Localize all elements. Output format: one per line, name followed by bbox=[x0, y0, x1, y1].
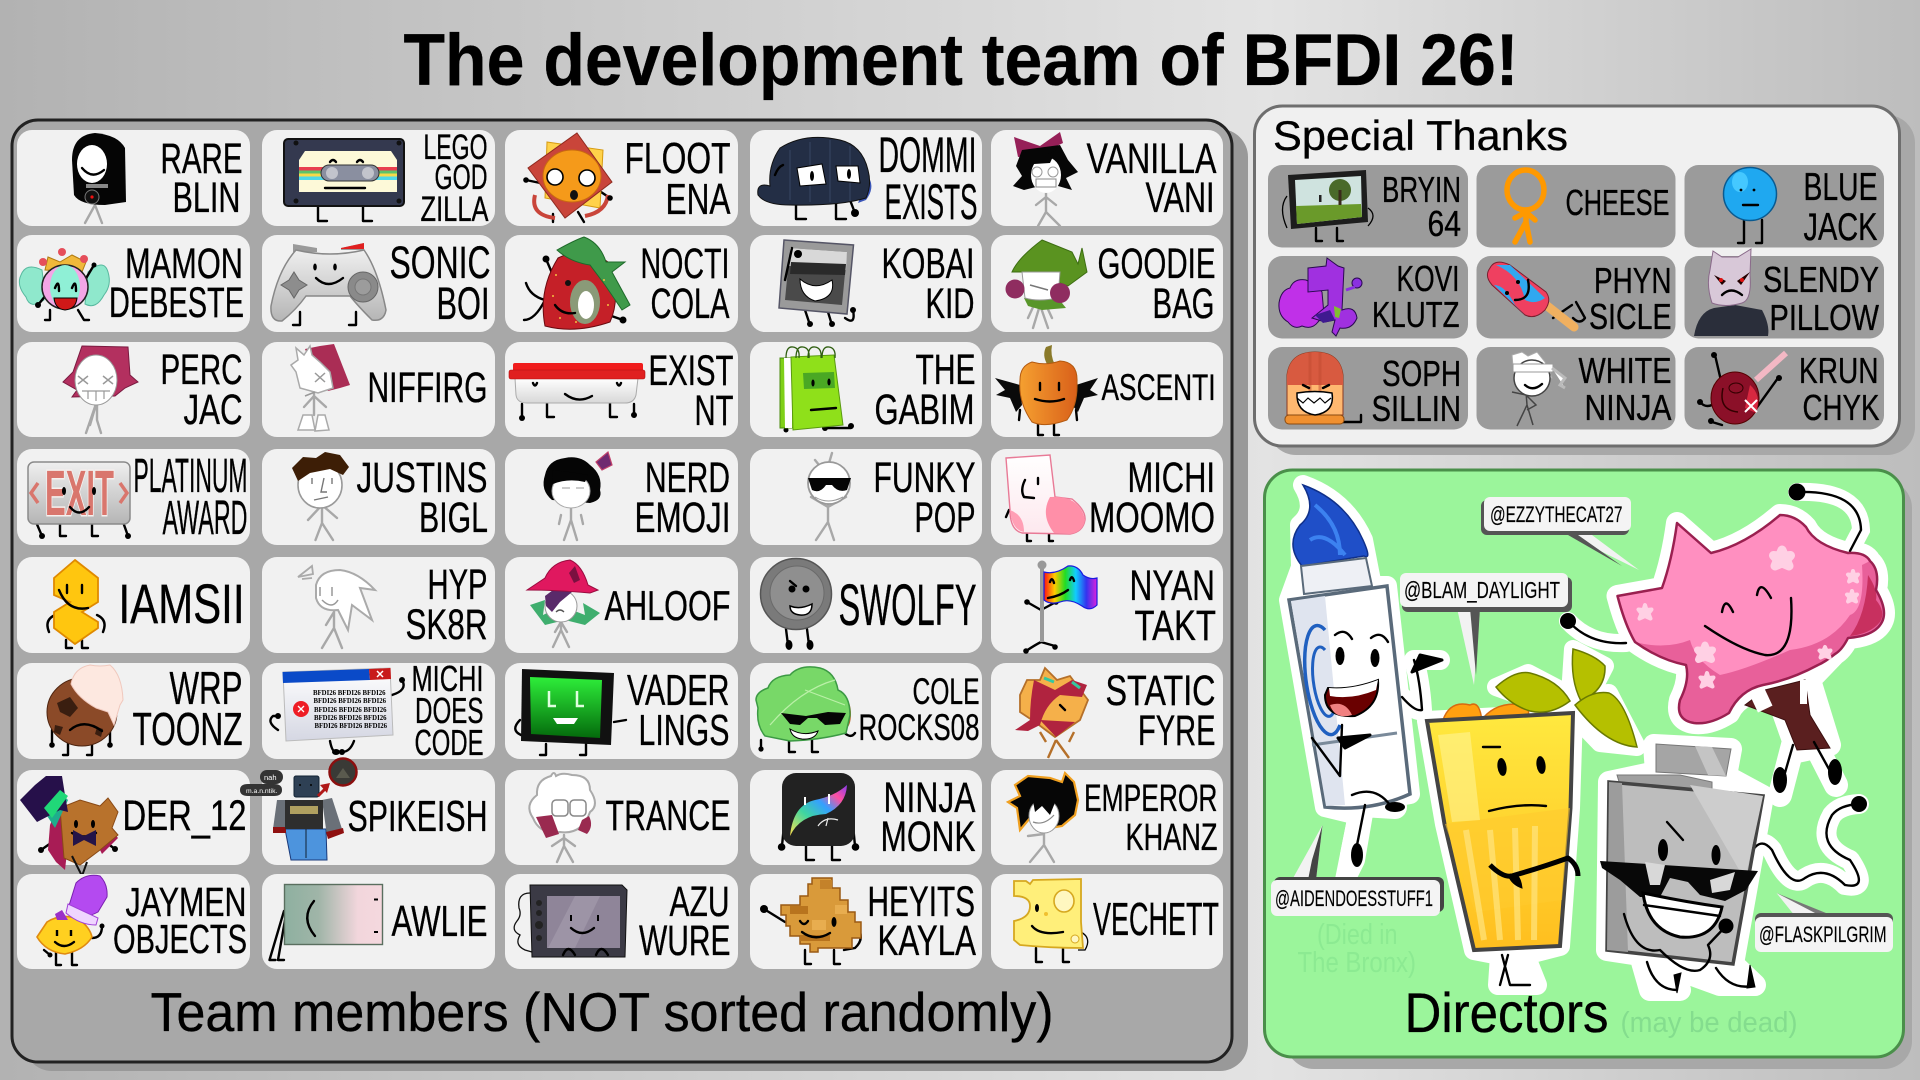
card: HEYITS KAYLA bbox=[750, 874, 982, 969]
icon: static fyre bbox=[1015, 668, 1088, 758]
card: NOCTI COLA bbox=[505, 235, 738, 332]
name: KOVI KLUTZ: KLUTZ bbox=[1372, 294, 1460, 335]
name: COLE ROCKS08: ROCKS08 bbox=[858, 707, 980, 748]
name: SOPH SILLIN: SILLIN bbox=[1372, 388, 1461, 429]
name: PHYN SICLE bbox=[1589, 260, 1672, 337]
name: NIFFIRG: NIFFIRG bbox=[368, 364, 488, 412]
name: VADER LINGS: VADER bbox=[627, 666, 730, 715]
name: LEGO GOD ZILLA: LEGO bbox=[424, 128, 488, 167]
card: RARE BLIN bbox=[17, 130, 250, 226]
card: FUNKY POP bbox=[750, 449, 982, 545]
card: KRUN CHYK bbox=[1684, 347, 1884, 430]
icon: strawberry bbox=[524, 237, 630, 329]
card: KOBAI KID bbox=[750, 235, 982, 332]
name: NYAN TAKT: TAKT bbox=[1134, 602, 1216, 650]
name: GOODIE BAG: BAG bbox=[1152, 280, 1214, 328]
card: FLOOT ENA bbox=[505, 130, 738, 226]
name: THE GABIM bbox=[874, 346, 976, 434]
card: TRANCE bbox=[505, 770, 738, 865]
name: WHITE NINJA bbox=[1578, 350, 1672, 428]
icon: drawing tablet bbox=[514, 885, 627, 957]
name: COLE ROCKS08 bbox=[858, 671, 980, 748]
card: AHLOOF bbox=[505, 557, 738, 653]
name: COLE ROCKS08: COLE bbox=[912, 671, 980, 712]
icon: procreate app bbox=[778, 773, 859, 860]
card: GOODIE BAG bbox=[991, 235, 1223, 332]
icon: cassette bbox=[284, 139, 404, 221]
icon: roblox avatar bbox=[240, 758, 356, 860]
card: IAMSII bbox=[17, 557, 250, 653]
icon: lettuce bbox=[756, 667, 855, 752]
name: NINJA MONK bbox=[880, 774, 976, 861]
card: MICHI MOOMO bbox=[991, 449, 1223, 545]
name: WRP TOONZ: TOONZ bbox=[132, 703, 242, 755]
name: NERD EMOJI bbox=[634, 454, 730, 542]
name: BRYIN 64: 64 bbox=[1428, 203, 1461, 244]
icon: roblox avatar: nah bbox=[264, 773, 277, 782]
name: SWOLFY: SWOLFY bbox=[838, 573, 976, 638]
name: STATIC FYRE: STATIC bbox=[1106, 667, 1216, 715]
name: GOODIE BAG bbox=[1098, 240, 1216, 328]
heading: directors: Directors bbox=[1404, 981, 1608, 1044]
name: AZU WURE: AZU bbox=[670, 878, 730, 926]
name: DOMMI EXISTS bbox=[878, 127, 978, 230]
name: KOBAI KID: KID bbox=[926, 280, 974, 328]
card: HYP SK8R bbox=[262, 557, 495, 653]
card: SPIKEISH bbox=[240, 758, 495, 865]
icon: error window: BFDI26 BFDI26 BFDI26 bbox=[314, 715, 387, 722]
panel: team members: AWARD bbox=[162, 492, 248, 545]
name: THE GABIM: THE bbox=[916, 346, 976, 394]
name: TRANCE: TRANCE bbox=[606, 792, 730, 840]
name: DER_12: DER_12 bbox=[122, 792, 246, 840]
panel: directors bbox=[1264, 470, 1912, 1069]
name: NINJA MONK: NINJA bbox=[884, 774, 976, 822]
icon: error window: BFDI26 BFDI26 BFDI26 bbox=[314, 698, 387, 705]
name: WHITE NINJA: WHITE bbox=[1578, 350, 1672, 391]
card: EXIST NT bbox=[505, 342, 738, 437]
card: LEGO GOD ZILLA bbox=[262, 128, 495, 229]
name: NOCTI COLA: NOCTI bbox=[640, 240, 730, 288]
callout: @BLAM_DAYLIGHT bbox=[1400, 573, 1572, 685]
icon: error window: BFDI26 BFDI26 BFDI26 bbox=[313, 690, 386, 697]
icon: game controller bbox=[271, 243, 386, 325]
name: AZU WURE bbox=[639, 878, 730, 965]
name: HYP SK8R: SK8R bbox=[406, 601, 488, 649]
name: SONIC BOI: SONIC bbox=[390, 237, 490, 288]
name: JAYMEN OBJECTS: OBJECTS bbox=[113, 916, 247, 962]
name: EMPEROR KHANZ bbox=[1084, 778, 1218, 859]
name: DOMMI EXISTS: EXISTS bbox=[884, 174, 978, 230]
name: MICHI DOES CODE: DOES bbox=[415, 690, 484, 731]
icon: white ninja bbox=[1512, 352, 1565, 426]
icon: iced cookie bbox=[47, 665, 123, 755]
name: MICHI DOES CODE bbox=[412, 658, 484, 763]
name: AZU WURE: WURE bbox=[639, 917, 730, 965]
card: NYAN TAKT bbox=[991, 557, 1223, 654]
name: IAMSII: IAMSII bbox=[118, 572, 244, 635]
callout: @AIDENDOESSTUFF1 bbox=[1271, 825, 1444, 916]
icon: floot ena sun bbox=[523, 133, 613, 222]
annotation: died in the bronx: The Bronx) bbox=[1298, 947, 1416, 979]
name: BLUE JACK: BLUE bbox=[1804, 166, 1878, 209]
card: AZU WURE bbox=[505, 874, 738, 969]
name: PLATINUM AWARD bbox=[134, 450, 248, 545]
annotation: may be dead: (may be dead) bbox=[1620, 1007, 1798, 1039]
name: NYAN TAKT bbox=[1130, 562, 1216, 650]
name: KOBAI KID: KOBAI bbox=[882, 240, 974, 288]
heading: special thanks: Special Thanks bbox=[1273, 112, 1568, 159]
card: WRP TOONZ bbox=[17, 662, 250, 759]
name: NYAN TAKT: NYAN bbox=[1130, 562, 1215, 610]
icon: error window bbox=[270, 668, 405, 755]
name: JUSTINS BIGL bbox=[356, 454, 488, 542]
icon: blue ball bbox=[1724, 168, 1776, 243]
name: JUSTINS BIGL: BIGL bbox=[419, 494, 488, 542]
name: SOPH SILLIN: SOPH bbox=[1382, 353, 1461, 394]
callout: @AIDENDOESSTUFF1: @AIDENDOESSTUFF1 bbox=[1275, 886, 1433, 911]
name: NOCTI COLA: COLA bbox=[650, 280, 730, 328]
name: WRP TOONZ: WRP bbox=[170, 662, 242, 714]
name: PERC JAC: JAC bbox=[184, 386, 242, 434]
name: CHEESE: CHEESE bbox=[1566, 182, 1670, 223]
icon: cheese bbox=[1014, 879, 1088, 962]
character: paint tube bbox=[1289, 485, 1442, 880]
card: SONIC BOI bbox=[262, 235, 495, 332]
name: HEYITS KAYLA: HEYITS bbox=[868, 878, 975, 926]
name: KRUN CHYK: KRUN bbox=[1799, 350, 1878, 391]
name: MAMON DEBESTE: DEBESTE bbox=[109, 279, 244, 327]
name: SOPH SILLIN bbox=[1372, 353, 1461, 429]
icon: trance bbox=[529, 773, 595, 862]
icon: lollipop bbox=[1697, 352, 1786, 425]
card: DOMMI EXISTS bbox=[750, 127, 982, 230]
card: PHYN SICLE bbox=[1476, 256, 1676, 338]
name: STATIC FYRE bbox=[1106, 667, 1216, 755]
name: KOVI KLUTZ bbox=[1372, 258, 1460, 335]
icon: red-lid container bbox=[509, 363, 645, 421]
icon: coin bbox=[760, 558, 832, 650]
icon: beanie bbox=[758, 137, 871, 219]
icon: lemon with hat bbox=[37, 875, 107, 965]
name: FUNKY POP bbox=[874, 454, 976, 542]
name: BRYIN 64 bbox=[1382, 169, 1461, 244]
name: NINJA MONK: MONK bbox=[880, 813, 976, 861]
icon: error window: BFDI26 BFDI26 BFDI26 bbox=[314, 707, 387, 714]
name: VADER LINGS: LINGS bbox=[638, 706, 730, 755]
icon: picture frame bbox=[1282, 170, 1373, 241]
name: VADER LINGS bbox=[627, 666, 730, 755]
card: PERC JAC bbox=[17, 342, 250, 437]
name: EMPEROR KHANZ: EMPEROR bbox=[1084, 778, 1218, 820]
name: EXIST NT: EXIST bbox=[648, 347, 734, 395]
title: The development team of BFDI 26! bbox=[404, 20, 1518, 101]
name: HYP SK8R: HYP bbox=[428, 561, 488, 609]
name: FLOOT ENA: FLOOT bbox=[624, 134, 730, 183]
icon: rainbow flag bbox=[1023, 560, 1097, 654]
panel: team members bbox=[12, 120, 1248, 1071]
card: SOPH SILLIN bbox=[1268, 347, 1468, 430]
icon: purple seven bbox=[1279, 258, 1362, 336]
panel caption: team members: Team members (NOT sorted randomly) bbox=[150, 981, 1054, 1043]
name: HEYITS KAYLA: KAYLA bbox=[878, 917, 976, 965]
name: FUNKY POP: FUNKY bbox=[874, 454, 976, 502]
annotation: died in the bronx: (Died in bbox=[1317, 919, 1398, 951]
icon: der top hat cookie bbox=[20, 776, 118, 876]
name: WRP TOONZ bbox=[132, 662, 242, 755]
card: VANILLA VANI bbox=[991, 130, 1223, 226]
card: WHITE NINJA bbox=[1476, 347, 1676, 430]
name: PHYN SICLE: SICLE bbox=[1589, 296, 1672, 337]
icon: exit sign: EXIT bbox=[45, 457, 114, 529]
card: VADER LINGS bbox=[505, 663, 738, 759]
card: STATIC FYRE bbox=[991, 663, 1223, 759]
icon: pixel nugget bbox=[760, 878, 861, 964]
icon: green monitor bbox=[515, 669, 626, 755]
card: EMPEROR KHANZ bbox=[991, 770, 1223, 865]
name: LEGO GOD ZILLA: ZILLA bbox=[420, 190, 489, 229]
name: BLUE JACK bbox=[1804, 166, 1878, 249]
callout: @EZZYTHECAT27: @EZZYTHECAT27 bbox=[1490, 502, 1622, 527]
name: PERC JAC bbox=[160, 346, 242, 434]
icon: mamon beach ball bbox=[19, 248, 109, 320]
name: SLENDY PILLOW bbox=[1763, 259, 1879, 338]
panel: team members: PLATINUM bbox=[134, 450, 248, 503]
icon: notebook bbox=[780, 347, 854, 432]
icon: popsicle bbox=[1487, 262, 1585, 327]
name: AWLIE: AWLIE bbox=[392, 897, 488, 946]
name: KRUN CHYK: CHYK bbox=[1802, 387, 1880, 428]
icon: sock bbox=[1006, 455, 1085, 541]
card: NIFFIRG bbox=[262, 342, 495, 437]
name: NERD EMOJI: EMOJI bbox=[634, 494, 730, 542]
name: BRYIN 64: BRYIN bbox=[1382, 169, 1461, 210]
card: NERD EMOJI bbox=[505, 449, 738, 545]
icon: gold s coin bbox=[47, 560, 105, 648]
name: MICHI DOES CODE: MICHI bbox=[412, 658, 484, 699]
card: AWLIE bbox=[262, 874, 495, 969]
card: KOVI KLUTZ bbox=[1268, 256, 1468, 338]
name: FUNKY POP: POP bbox=[914, 494, 976, 542]
card: JAYMEN OBJECTS bbox=[17, 874, 250, 969]
icon: bell pepper bbox=[995, 345, 1098, 435]
icon: hyp sk8r bbox=[298, 566, 375, 648]
card: BLUE JACK bbox=[1684, 165, 1884, 249]
card: NINJA MONK bbox=[750, 770, 982, 865]
card: DER_12 bbox=[17, 770, 250, 876]
name: DOMMI EXISTS: DOMMI bbox=[878, 127, 976, 183]
annotation: died in the bronx bbox=[1298, 919, 1416, 979]
name: SONIC BOI: BOI bbox=[436, 278, 490, 329]
card: MICHI DOES CODE bbox=[262, 658, 495, 763]
name: HEYITS KAYLA bbox=[868, 878, 976, 965]
panel: special thanks bbox=[1254, 106, 1915, 455]
callout: @EZZYTHECAT27 bbox=[1481, 497, 1639, 570]
card: ASCENTI bbox=[991, 342, 1223, 437]
name: PHYN SICLE: PHYN bbox=[1594, 260, 1672, 301]
name: MICHI DOES CODE: CODE bbox=[414, 722, 484, 763]
name: MAMON DEBESTE: MAMON bbox=[125, 240, 243, 288]
name: SLENDY PILLOW: SLENDY bbox=[1763, 259, 1879, 300]
card: THE GABIM bbox=[750, 342, 982, 437]
icon: photo bbox=[779, 240, 856, 327]
name: MAMON DEBESTE bbox=[109, 240, 244, 327]
name: RARE BLIN bbox=[160, 135, 242, 222]
name: PERC JAC: PERC bbox=[160, 346, 242, 394]
name: AHLOOF: AHLOOF bbox=[604, 582, 730, 629]
name: BLUE JACK: JACK bbox=[1804, 206, 1878, 249]
name: KOBAI KID bbox=[882, 240, 974, 328]
name: JAYMEN OBJECTS: JAYMEN bbox=[126, 879, 246, 925]
name: WHITE NINJA: NINJA bbox=[1584, 387, 1672, 428]
name: STATIC FYRE: FYRE bbox=[1138, 707, 1216, 755]
name: THE GABIM: GABIM bbox=[874, 386, 974, 434]
name: VANILLA VANI: VANILLA bbox=[1086, 135, 1217, 183]
card: SLENDY PILLOW bbox=[1684, 249, 1884, 338]
icon: emperor khanz bbox=[1008, 773, 1078, 862]
name: NOCTI COLA bbox=[640, 240, 730, 328]
name: EMPEROR KHANZ: KHANZ bbox=[1126, 817, 1218, 859]
character: flask with sunglasses bbox=[1600, 744, 1867, 993]
name: EXIST NT: NT bbox=[694, 387, 734, 435]
card: COLE ROCKS08 bbox=[750, 663, 982, 759]
name: SONIC BOI bbox=[390, 237, 490, 329]
name: FLOOT ENA: ENA bbox=[666, 175, 731, 224]
icon: error window: BFDI26 BFDI26 BFDI26 bbox=[314, 723, 388, 730]
name: VANILLA VANI: VANI bbox=[1146, 174, 1214, 222]
name: SPIKEISH: SPIKEISH bbox=[348, 792, 488, 841]
name: KOVI KLUTZ: KOVI bbox=[1396, 258, 1460, 299]
name: ASCENTI: ASCENTI bbox=[1102, 367, 1216, 408]
icon: niffirg bbox=[291, 344, 350, 431]
card: JUSTINS BIGL bbox=[262, 449, 495, 545]
icon: slendy pillow bbox=[1694, 249, 1768, 336]
icon: goodie bag bbox=[1006, 240, 1087, 328]
card: BRYIN 64 bbox=[1268, 165, 1468, 248]
character: lemonade glass bbox=[1427, 649, 1637, 985]
icon: witch hat bbox=[527, 560, 600, 647]
icon: vanilla vani bbox=[1013, 132, 1078, 226]
icon: funky pop bbox=[808, 453, 851, 540]
icon: bullet bbox=[1285, 352, 1361, 424]
icon: roblox avatar: m.a.n.ntik. bbox=[246, 788, 277, 795]
name: HYP SK8R bbox=[406, 561, 488, 649]
name: GOODIE BAG: GOODIE bbox=[1098, 240, 1216, 288]
name: MICHI MOOMO: MOOMO bbox=[1089, 494, 1215, 542]
icon: nerd emoji bbox=[544, 452, 612, 540]
name: VECHETT: VECHETT bbox=[1093, 893, 1219, 945]
card: SWOLFY bbox=[750, 557, 982, 653]
name: JUSTINS BIGL: JUSTINS bbox=[356, 454, 488, 502]
callout: @FLASKPILGRIM bbox=[1755, 893, 1893, 952]
callout: @BLAM_DAYLIGHT: @BLAM_DAYLIGHT bbox=[1404, 577, 1560, 603]
name: RARE BLIN: RARE bbox=[160, 135, 242, 183]
card: MAMON DEBESTE bbox=[17, 235, 250, 332]
name: EXIST NT bbox=[648, 347, 734, 435]
icon: rare blin bbox=[72, 133, 126, 223]
name: NERD EMOJI: NERD bbox=[645, 454, 730, 502]
icon: flag bbox=[270, 884, 382, 960]
icon: justins bigl bbox=[292, 452, 349, 540]
icon: orange stick figure bbox=[1507, 170, 1544, 242]
card: VECHETT bbox=[991, 874, 1223, 969]
name: KRUN CHYK bbox=[1799, 350, 1880, 428]
name: LEGO GOD ZILLA bbox=[420, 128, 489, 229]
card: CHEESE bbox=[1476, 165, 1676, 248]
name: VANILLA VANI bbox=[1086, 135, 1217, 222]
name: LEGO GOD ZILLA: GOD bbox=[434, 158, 488, 197]
name: SLENDY PILLOW: PILLOW bbox=[1770, 297, 1879, 338]
name: MICHI MOOMO bbox=[1089, 454, 1215, 542]
card: PLATINUM AWARD bbox=[17, 449, 250, 545]
icon: exit sign bbox=[28, 457, 131, 539]
name: RARE BLIN: BLIN bbox=[172, 174, 240, 222]
name: MICHI MOOMO: MICHI bbox=[1128, 454, 1215, 502]
name: JAYMEN OBJECTS bbox=[113, 879, 247, 962]
character: cherry blossom tree bbox=[1560, 484, 1884, 795]
name: FLOOT ENA bbox=[624, 134, 731, 224]
icon: perc jac bbox=[63, 346, 138, 433]
